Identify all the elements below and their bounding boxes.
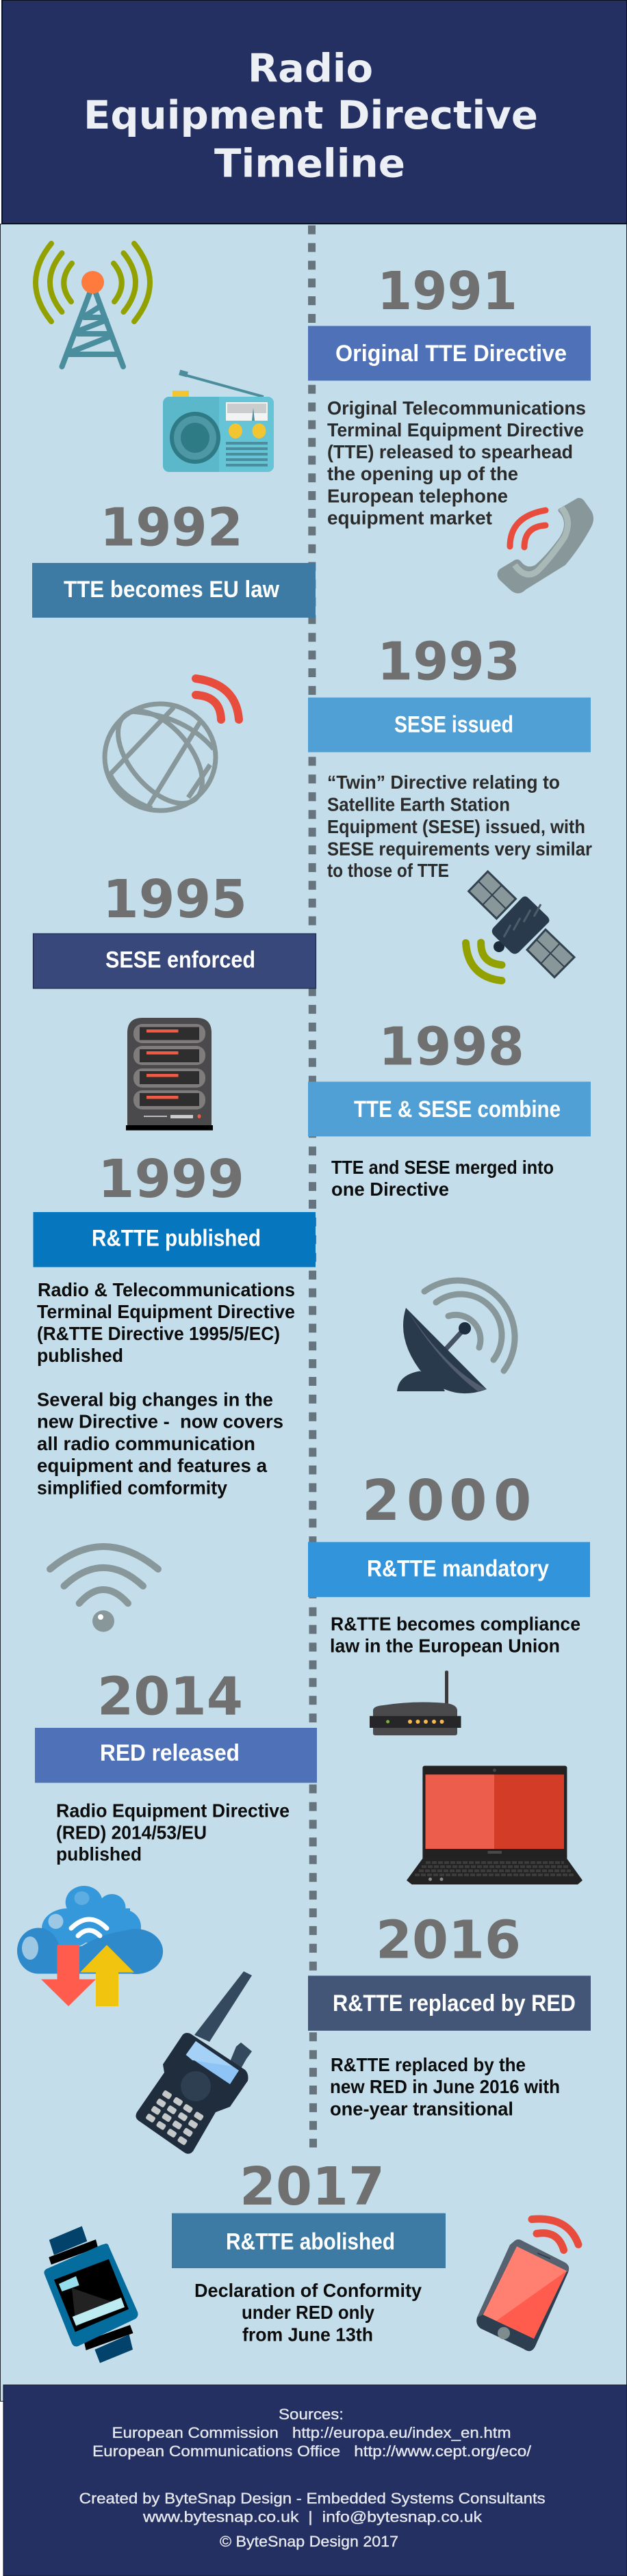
icon: walkie-talkie	[136, 1971, 252, 2154]
sources	[92, 2406, 532, 2460]
text: 2014 description: Radio Equipment Directive	[56, 1800, 290, 1822]
icon: smartphone	[476, 2219, 578, 2351]
banner: RED released: RED released	[100, 1740, 240, 1766]
icon: smartwatch	[44, 2226, 138, 2363]
icon: satellite dish	[397, 1280, 515, 1393]
banner: TTE & SESE combine: TTE & SESE combine	[354, 1096, 561, 1122]
text: 1998 description	[331, 1157, 554, 1200]
banner: Original TTE Directive: Original TTE Directive	[335, 341, 567, 367]
text: 1993 description: to those of TTE	[327, 860, 449, 881]
text: 1999 description: (R&TTE Directive 1995/5/EC)	[37, 1323, 280, 1344]
banner: SESE issued	[308, 698, 591, 752]
sources: Sources:	[279, 2406, 344, 2423]
text: 1999 description: Terminal Equipment Directive	[37, 1301, 295, 1322]
banner: TTE & SESE combine	[308, 1081, 591, 1136]
banner: R&TTE mandatory: R&TTE mandatory	[367, 1556, 549, 1582]
icon: globe with signal	[102, 679, 239, 819]
year 2017: 2017	[240, 2157, 385, 2218]
year 1995: 1995	[103, 869, 247, 930]
text: 1993 description: SESE requirements very similar	[327, 839, 592, 860]
icon: satellite	[465, 871, 574, 981]
year 2016: 2016	[376, 1910, 521, 1971]
year 1998: 1998	[379, 1016, 524, 1078]
text: 1991 description	[327, 397, 586, 529]
panel: footer	[3, 2385, 627, 2576]
text: 2014 description	[56, 1800, 290, 1865]
text: 1991 description: the opening up of the	[327, 463, 518, 484]
credits: www.bytesnap.co.uk | info@bytesnap.co.uk	[142, 2508, 483, 2525]
year 2014: 2014	[97, 1667, 243, 1728]
banner: SESE enforced: SESE enforced	[105, 947, 255, 973]
timeline dashed line	[312, 226, 314, 2148]
banner: RED released	[35, 1728, 317, 1783]
text: 1991 description: Original Telecommunications	[327, 397, 586, 419]
year 1993: 1993	[377, 632, 520, 693]
text: 1993 description	[327, 772, 592, 881]
panel: 1998	[308, 1016, 591, 1200]
text: 1999 description: simplified comformity	[37, 1477, 227, 1498]
banner: Original TTE Directive	[308, 326, 591, 380]
text: 1998 description: TTE and SESE merged into	[331, 1157, 554, 1178]
text: 2016 description: new RED in June 2016 with	[330, 2076, 560, 2097]
sources: European Commission http://europa.eu/index_en.htm	[112, 2424, 511, 2441]
panel: 1991	[308, 261, 591, 529]
banner: R&TTE replaced by RED	[308, 1975, 591, 2031]
text: 2016 description: R&TTE replaced by the	[331, 2054, 526, 2075]
panel: 1999	[33, 1149, 316, 1498]
banner: R&TTE abolished: R&TTE abolished	[226, 2229, 395, 2255]
banner: TTE becomes EU law: TTE becomes EU law	[64, 577, 280, 603]
panel: 2017	[172, 2157, 446, 2345]
icon: server rack	[126, 1018, 213, 1130]
year 2000: 2000	[362, 1469, 531, 1534]
text: 1998 description: one Directive	[331, 1179, 449, 1200]
text: 1993 description: “Twin” Directive relating to	[327, 772, 560, 793]
icon: radio tower	[36, 244, 150, 367]
credits: © ByteSnap Design 2017	[220, 2533, 398, 2550]
banner: SESE enforced	[33, 934, 316, 988]
text: 1999 description: all radio communication	[37, 1433, 255, 1454]
banner: TTE becomes EU law	[32, 563, 316, 618]
title: Radio	[248, 46, 373, 91]
text: 1999 description: equipment and features a	[37, 1455, 267, 1476]
title	[84, 46, 538, 186]
banner: R&TTE replaced by RED: R&TTE replaced by RED	[333, 1990, 576, 2016]
title: Equipment Directive	[84, 93, 538, 138]
text: 2017 description: from June 13th	[242, 2324, 373, 2345]
text: 1999 description: Several big changes in the	[37, 1389, 273, 1410]
text: 2017 description: under RED only	[242, 2302, 374, 2323]
panel: 2000	[308, 1469, 590, 1657]
text: 1991 description: (TTE) released to spearhead	[327, 441, 573, 462]
text: 1999 description: new Directive - now covers	[37, 1411, 283, 1432]
text: 1999 description: published	[37, 1345, 123, 1366]
text: 2016 description	[330, 2054, 560, 2119]
year 1992: 1992	[100, 498, 243, 558]
text: 1999 description: Radio & Telecommunications	[38, 1279, 295, 1300]
text: 1999 description	[37, 1279, 295, 1498]
banner: R&TTE abolished	[172, 2213, 446, 2268]
text: 2017 description: Declaration of Conformity	[194, 2280, 422, 2301]
text: 2000 description: R&TTE becomes compliance	[331, 1613, 580, 1634]
text: 1991 description: equipment market	[327, 508, 492, 529]
sources: European Communications Office http://www.cept.org/eco/	[92, 2443, 532, 2460]
text: 2014 description: published	[56, 1843, 142, 1865]
panel: 1995	[33, 869, 316, 988]
icon: laptop	[407, 1766, 583, 1884]
panel: 2014	[35, 1667, 317, 1865]
text: 2017 description	[194, 2280, 422, 2345]
banner: R&TTE published: R&TTE published	[92, 1226, 261, 1252]
year 1999: 1999	[98, 1149, 244, 1210]
banner: R&TTE published	[33, 1212, 316, 1267]
icon: telephone handset	[497, 498, 593, 594]
text: 1991 description: Terminal Equipment Directive	[327, 419, 584, 441]
panel: title header	[2, 0, 627, 224]
panel: 1992	[32, 498, 316, 618]
banner: R&TTE mandatory	[308, 1542, 590, 1597]
banner: SESE issued: SESE issued	[394, 712, 513, 738]
text: 2016 description: one-year transitional	[330, 2099, 513, 2119]
icon: router	[370, 1670, 461, 1735]
icon: cloud with arrows	[17, 1886, 163, 2006]
text: 2000 description: law in the European Union	[330, 1635, 560, 1657]
panel: 1993	[308, 632, 592, 881]
text: 2014 description: (RED) 2014/53/EU	[56, 1822, 207, 1843]
credits	[79, 2490, 546, 2550]
year 1991: 1991	[377, 261, 517, 322]
text: 1993 description: Satellite Earth Station	[327, 794, 510, 815]
icon: retro radio	[163, 370, 274, 472]
text: 1993 description: Equipment (SESE) issued, with	[327, 816, 585, 837]
credits: Created by ByteSnap Design - Embedded Systems Consultants	[79, 2490, 546, 2507]
panel: 2016	[308, 1910, 591, 2119]
text: 1991 description: European telephone	[327, 486, 508, 506]
title: Timeline	[214, 141, 405, 186]
icon: wifi signal	[50, 1547, 158, 1632]
text: 2000 description	[330, 1613, 580, 1657]
